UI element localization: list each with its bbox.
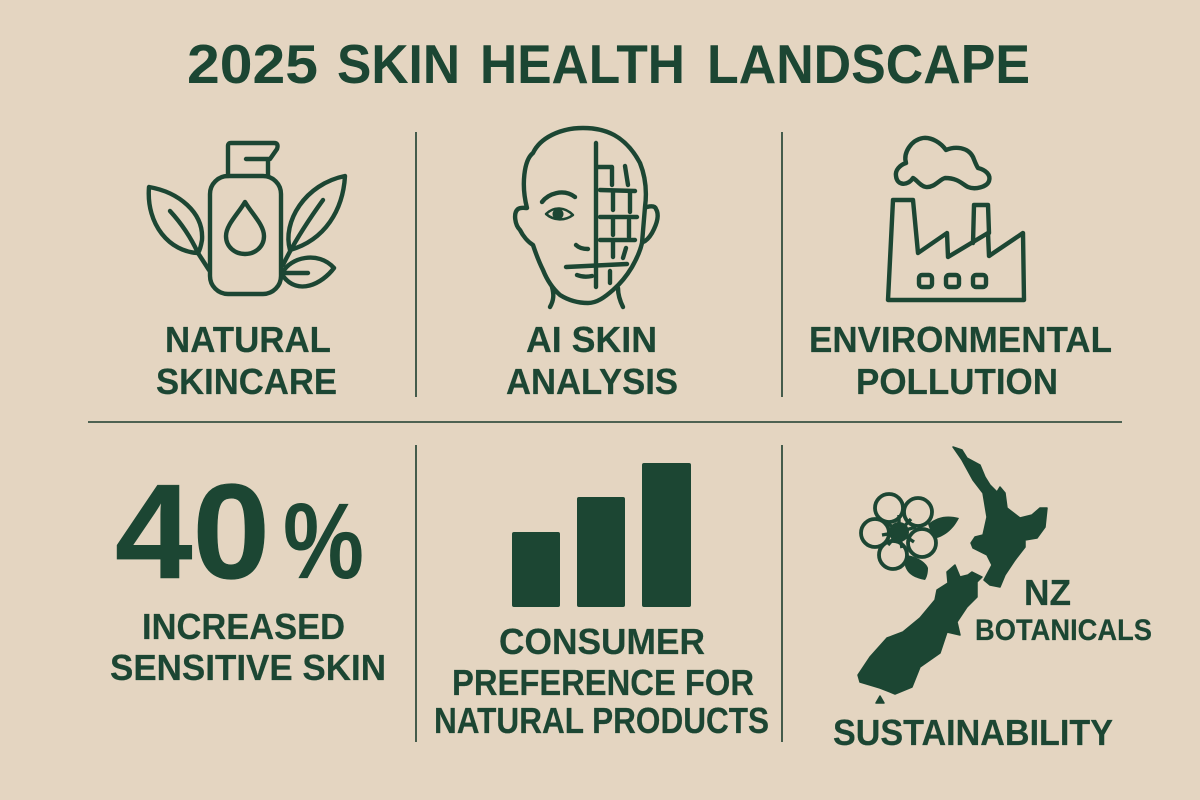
label: NZ botanicals (975, 572, 1152, 647)
label: NZ botanicals: NZ (1024, 572, 1071, 613)
title: 2025 (187, 33, 318, 95)
label: increased sensitive skin: SENSITIVE SKIN (110, 647, 386, 688)
title: HEALTH (480, 33, 685, 95)
label: sustainability: SUSTAINABILITY (833, 712, 1113, 753)
label: increased sensitive skin (110, 606, 386, 688)
title (187, 33, 1030, 95)
label: environmental pollution: ENVIRONMENTAL (809, 319, 1112, 360)
label: consumer preference for natural products: CONSUMER (499, 621, 705, 662)
icon: manuka flower (861, 494, 959, 580)
panel: natural skincare (149, 143, 345, 402)
icon: bottle with leaves and drop (149, 143, 345, 294)
title: SKIN (337, 33, 460, 95)
label: environmental pollution (809, 319, 1112, 402)
label: environmental pollution: POLLUTION (856, 361, 1058, 402)
label: AI skin analysis: ANALYSIS (506, 361, 678, 402)
label: consumer preference for natural products (434, 621, 769, 741)
label: NZ botanicals: BOTANICALS (975, 614, 1152, 647)
label: natural skincare (156, 319, 337, 402)
map: New Zealand (858, 447, 1047, 703)
label: consumer preference for natural products: NATURAL PRODUCTS (434, 700, 769, 741)
label: natural skincare: NATURAL (165, 319, 331, 360)
icon: cloud above factory (888, 138, 1024, 300)
panel: consumer preference (434, 463, 769, 741)
panel: AI skin analysis (506, 128, 678, 402)
label: AI skin analysis (506, 319, 678, 402)
panel: increased sensitive skin (110, 456, 386, 688)
label: increased sensitive skin: INCREASED (142, 606, 345, 647)
icon: face with analysis grid (515, 128, 658, 307)
panel: NZ botanicals and sustainability (833, 447, 1152, 753)
statistic: 40 percent: 40 (115, 456, 270, 607)
panel: environmental pollution (809, 138, 1112, 402)
label: natural skincare: SKINCARE (156, 361, 337, 402)
statistic: 40 percent (115, 456, 364, 607)
statistic: 40 percent: % (283, 480, 364, 601)
label: consumer preference for natural products: PREFERENCE FOR (452, 662, 754, 703)
bar chart (512, 463, 691, 607)
title: LANDSCAPE (707, 33, 1030, 95)
label: AI skin analysis: AI SKIN (526, 319, 657, 360)
